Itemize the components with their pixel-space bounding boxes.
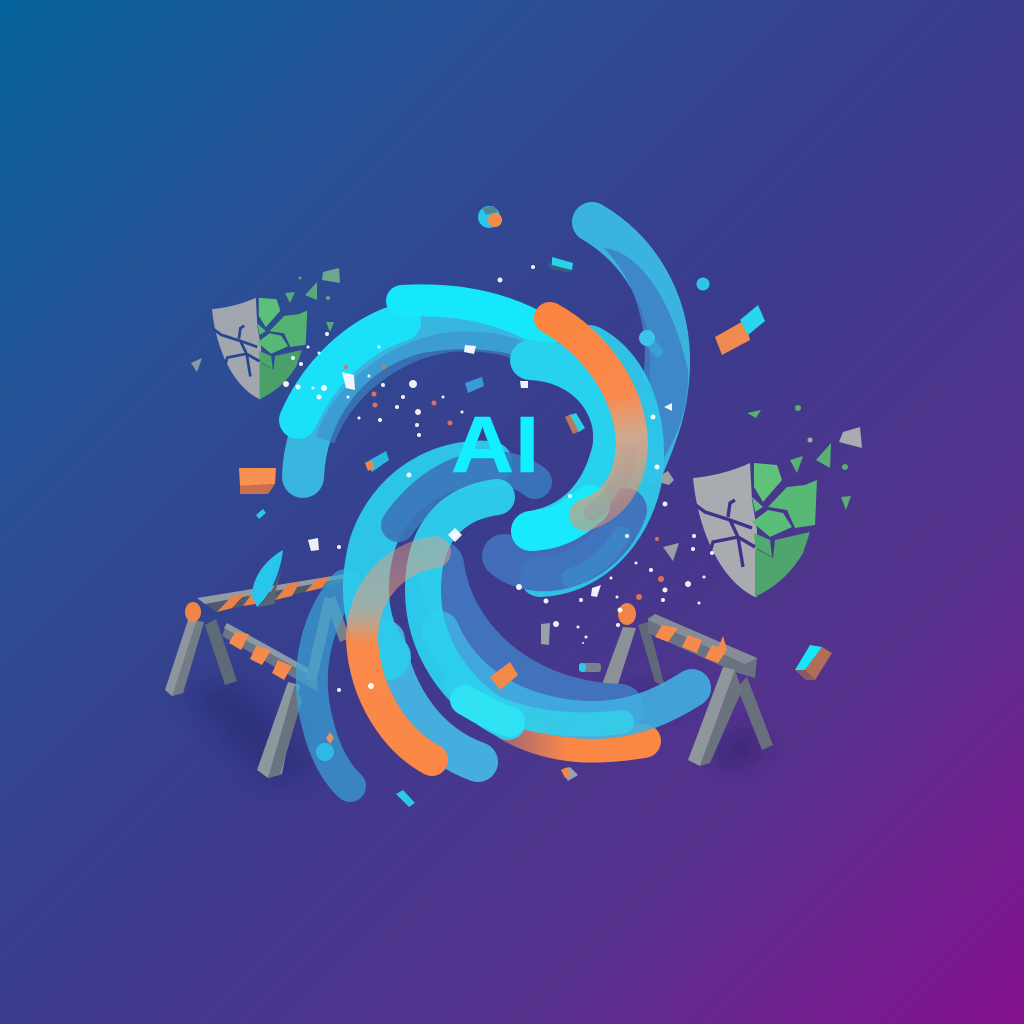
left shield shards [191,268,340,372]
AI title: AI [451,399,540,489]
block: small capsule [579,663,601,672]
right cracked shield [693,463,817,597]
right shield shards [661,405,862,561]
block: bottom [561,767,578,781]
block: centre blue [465,377,484,393]
swirl: AI vortex strokes [298,222,692,786]
block: centre orange [565,413,585,434]
block: grey [541,623,550,645]
orange bottom stroke [510,725,644,746]
blue dot on right arc [639,330,658,352]
block: right lower [795,645,832,680]
lower blue stroke [385,640,478,762]
block: orange left [239,468,276,494]
lower cyan stroke [366,464,490,657]
upper light-blue arc [303,328,590,477]
right barrier [597,603,773,772]
left barrier [165,550,345,785]
block: tiny cyan [256,509,266,519]
debris particles [283,265,714,692]
small orange on far left stroke [326,732,334,744]
block: cyan top [548,257,573,273]
dark inner crescent of right swirl [504,510,625,569]
far right arc [592,222,670,465]
inner hook [530,360,613,531]
block: centre left [365,451,389,472]
floating blocks [239,206,832,807]
block: bottom cyan [396,790,415,807]
broken rail fragment [252,550,283,607]
orange debris particles [344,365,664,600]
right-going blue stroke [440,630,692,720]
darker inner band of upper arc [325,341,548,440]
bright centre stroke [423,497,508,722]
upper bright arc [298,322,402,420]
outer right swirl [540,345,644,577]
block: orange cyan right [715,305,765,355]
far left translucent stroke [312,585,350,786]
dot: cyan right [696,278,710,290]
orange upper stroke [550,318,632,515]
dark band on lower cyan [398,468,535,525]
left cracked shield [212,298,307,399]
dark crescent [440,565,620,708]
block: orange on swirl [490,662,518,690]
block: top orange-cyan [478,206,502,228]
bright lower ribbon [455,685,622,724]
orange lower stroke [362,552,435,760]
cyan blob on far left stroke [316,743,334,761]
